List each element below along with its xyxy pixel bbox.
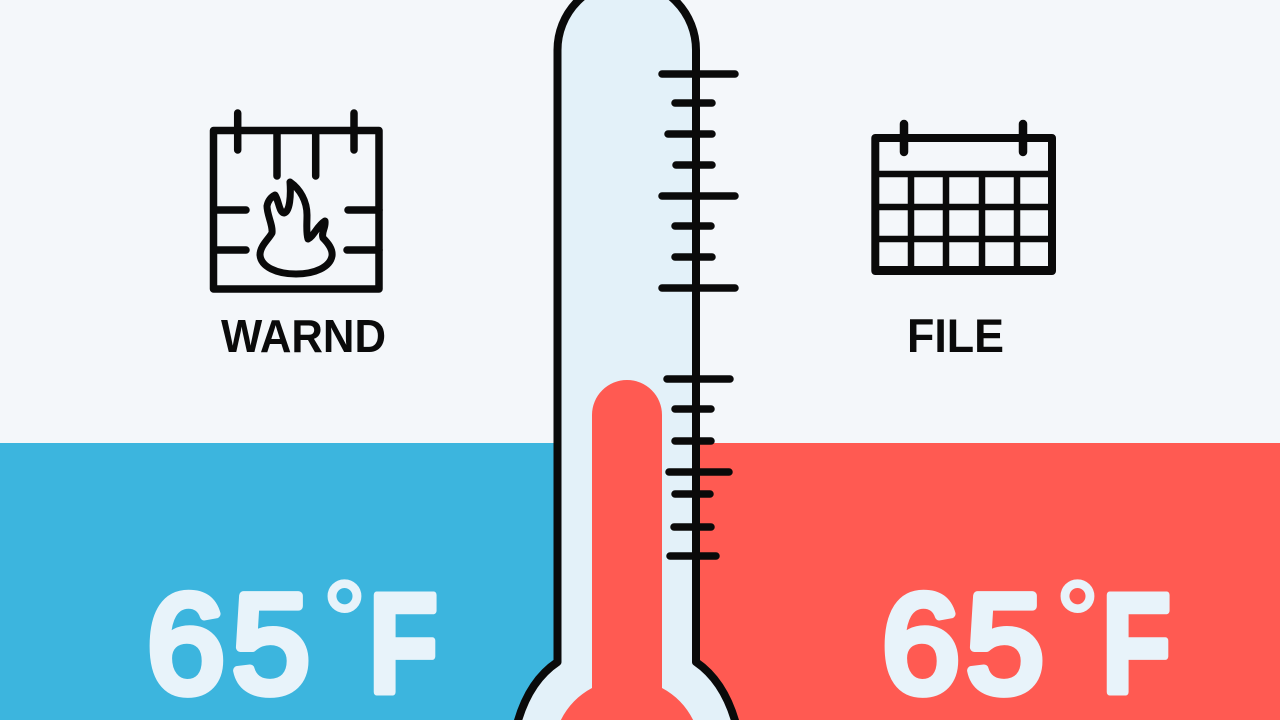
label: WARND: WARND [221, 310, 386, 362]
temperature: cold reading [147, 559, 438, 720]
temperature: warm reading: 65 [882, 565, 1044, 720]
thermometer [517, 0, 736, 720]
temperature: warm reading: ° [1056, 559, 1100, 682]
icon: calendar with flame [214, 113, 379, 289]
temperature: cold reading: F [369, 565, 438, 720]
temperature: warm reading: F [1102, 565, 1171, 720]
mercury column [559, 380, 695, 720]
scale ticks [662, 74, 735, 556]
panel: warm side [696, 443, 1280, 720]
temperature: cold reading: 65 [147, 565, 310, 720]
panel: cold side [0, 443, 556, 720]
label: FILE: FILE [907, 309, 1004, 362]
temperature: cold reading: ° [322, 559, 366, 682]
temperature: warm reading [882, 559, 1171, 720]
icon: calendar [875, 124, 1052, 271]
thermometer glass tube and bulb [517, 0, 736, 720]
icon: flame [260, 182, 332, 274]
